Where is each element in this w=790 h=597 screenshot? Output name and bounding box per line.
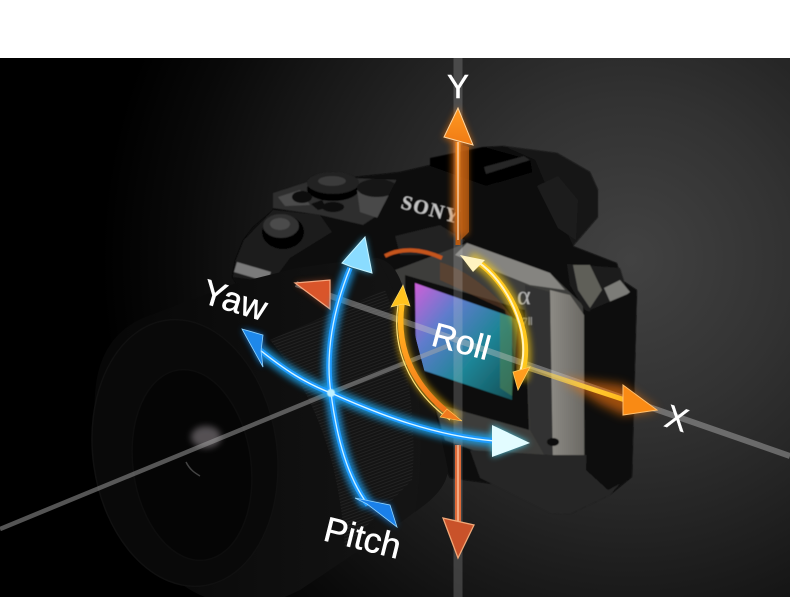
front glass (120, 362, 264, 568)
pitch top head (342, 237, 372, 273)
SONY logo: SONY (399, 192, 463, 228)
z axis beam (0, 345, 450, 529)
left arc (401, 303, 455, 418)
pitch top head glow (342, 237, 372, 273)
viewfinder eyepiece (503, 146, 598, 246)
right top head (460, 255, 485, 272)
body silhouette (232, 146, 637, 514)
metal side bracket (573, 265, 602, 308)
yaw left head (242, 329, 263, 367)
right arrowhead (623, 385, 657, 415)
yaw arc (260, 350, 495, 441)
right arrow glow (560, 378, 657, 415)
top dial (307, 172, 359, 201)
barrel (95, 258, 448, 597)
pitch arc core (329, 268, 368, 505)
shutter button (262, 214, 304, 249)
right arc core (478, 262, 523, 372)
rear shutter mirror colors (440, 262, 525, 385)
yaw arc core (260, 350, 495, 441)
x axis beam (296, 284, 790, 456)
label: Pitch: Pitch (320, 510, 405, 567)
small buttons (292, 191, 344, 212)
label: Roll: Roll (428, 316, 494, 368)
rear dark grip strip (586, 290, 637, 490)
label: Yaw: Yaw (198, 272, 272, 329)
orange mount ring (385, 250, 442, 258)
chassis slot (547, 438, 559, 446)
lower shaft core (457, 445, 459, 525)
left arc edge (397, 305, 450, 420)
upper glow (443, 107, 474, 235)
upper shaft core (457, 142, 459, 240)
ribbed zoom ring (270, 290, 413, 548)
chassis back panel (395, 243, 585, 478)
pitch arc (329, 268, 368, 505)
mount ring (377, 258, 448, 512)
left bottom head (440, 409, 462, 421)
right bottom head (513, 367, 530, 390)
left glow (400, 300, 458, 419)
exposure dial (357, 179, 397, 218)
upper shaft (456, 142, 460, 245)
alpha model mark: α (517, 281, 531, 310)
Pitch and Yaw arrows (242, 237, 530, 527)
rear gray bracket (567, 264, 630, 315)
lens barrel (75, 258, 448, 597)
crossing glint (327, 389, 335, 397)
triangle bracket (604, 280, 630, 306)
mount top mechanism (395, 225, 465, 255)
y axis beam (454, 58, 462, 597)
alpha model mark (517, 281, 533, 328)
left top head (391, 285, 410, 307)
front dial (234, 262, 271, 282)
left arrow glow (295, 280, 330, 309)
chassis inner column (525, 285, 553, 470)
lower translucent base (470, 450, 632, 514)
right shaft (525, 367, 640, 405)
yaw right head glow (492, 425, 530, 457)
lens reflection (191, 426, 221, 448)
upper orange strip (461, 145, 469, 240)
prism housing (375, 166, 575, 245)
alpha model mark: 7Ⅱ (522, 316, 533, 328)
top plate (273, 178, 400, 225)
yaw glow (260, 350, 495, 441)
X axis arrows (295, 280, 657, 415)
sensor lower edge (416, 368, 520, 422)
lower shaft (455, 445, 461, 525)
lower glow (452, 450, 464, 540)
pitch bottom head (355, 498, 397, 527)
image sensor (415, 283, 512, 400)
front ring (75, 308, 295, 597)
hot shoe (430, 147, 532, 186)
frame opening (405, 275, 529, 430)
green reflection band (500, 313, 518, 396)
yaw right head (492, 425, 530, 457)
grip (233, 210, 332, 282)
pitch bottom head glow (355, 498, 397, 527)
yaw left head glow (242, 329, 263, 367)
upper arrowhead (444, 108, 473, 145)
right glow (470, 258, 525, 380)
chassis top rim (455, 243, 565, 290)
label: Y: Y (447, 68, 469, 105)
lower arrowhead (443, 518, 474, 558)
right arc (478, 262, 525, 372)
Roll arrows (391, 255, 530, 421)
pitch glow (329, 268, 368, 505)
Y axis arrow (443, 107, 474, 558)
left arrowhead (295, 280, 330, 309)
top plate gloss (278, 190, 310, 206)
inner arc highlight (186, 462, 200, 476)
white top band (0, 0, 790, 58)
chassis side column (550, 290, 584, 478)
label: X: X (661, 397, 693, 439)
camera body (232, 146, 637, 514)
